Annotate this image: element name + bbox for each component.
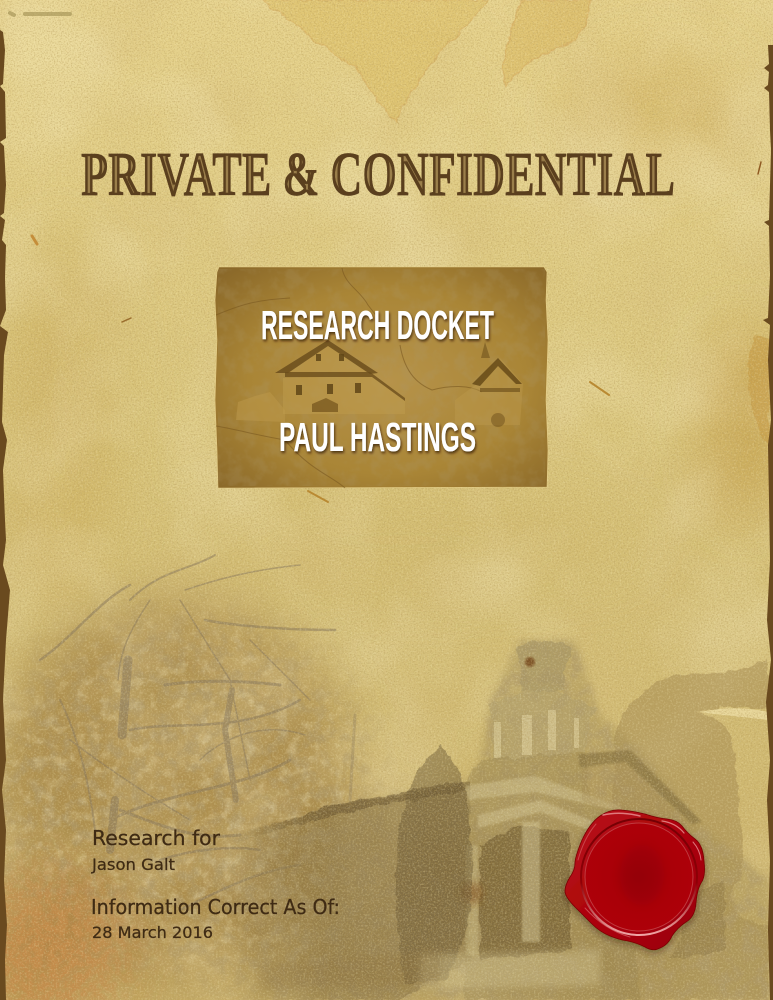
tower body (465, 752, 640, 1000)
wing roofline (235, 780, 470, 842)
dark porch (480, 825, 570, 960)
seal center shading (620, 845, 664, 905)
panel background (215, 267, 548, 488)
stain on cupola (525, 657, 535, 667)
stain behind building (600, 660, 768, 1000)
background illustration: large building with cupola (240, 637, 770, 1000)
label: information date: Information Correct As Of: (91, 895, 340, 919)
panel: research docket (215, 267, 548, 488)
value: date: 28 March 2016 (92, 923, 213, 942)
panel sketch: village and house (236, 340, 523, 427)
porch stain (461, 882, 483, 904)
panel mottling (218, 269, 545, 486)
right edge (763, 45, 773, 1000)
rust corner (4, 852, 142, 1000)
cream patch on stain (700, 708, 768, 720)
panel heading: paul hastings: PAUL HASTINGS (279, 414, 476, 460)
right wing block (670, 880, 725, 960)
pediment (578, 750, 702, 824)
value: client name: Jason Galt (91, 855, 175, 874)
wing with fading left side (225, 782, 470, 1000)
cupola columns (494, 710, 579, 758)
water stains at top (262, 0, 770, 445)
panel cracks (216, 268, 482, 488)
small paper marks (10, 13, 761, 502)
foliage texture (3, 611, 380, 984)
cupola top (516, 641, 572, 692)
text block: research details (91, 826, 340, 942)
background illustration: autumn trees (3, 554, 380, 1000)
seal highlights (578, 813, 701, 937)
mottled building texture (283, 637, 770, 1000)
seal inner disc (585, 823, 693, 931)
seal body (565, 810, 705, 950)
cupola middle (488, 686, 597, 762)
panel heading: research docket: RESEARCH DOCKET (261, 302, 494, 348)
seal outer ring (581, 819, 697, 935)
tree branches (40, 555, 355, 910)
cornice bands (465, 776, 622, 812)
title (81, 141, 675, 209)
columns (522, 822, 540, 942)
foreground fence (260, 950, 440, 990)
left edge (0, 30, 10, 1000)
label: research for: Research for (92, 826, 221, 850)
icon: red wax seal (565, 810, 705, 950)
steps (420, 950, 600, 990)
tree in front of building (396, 745, 473, 985)
